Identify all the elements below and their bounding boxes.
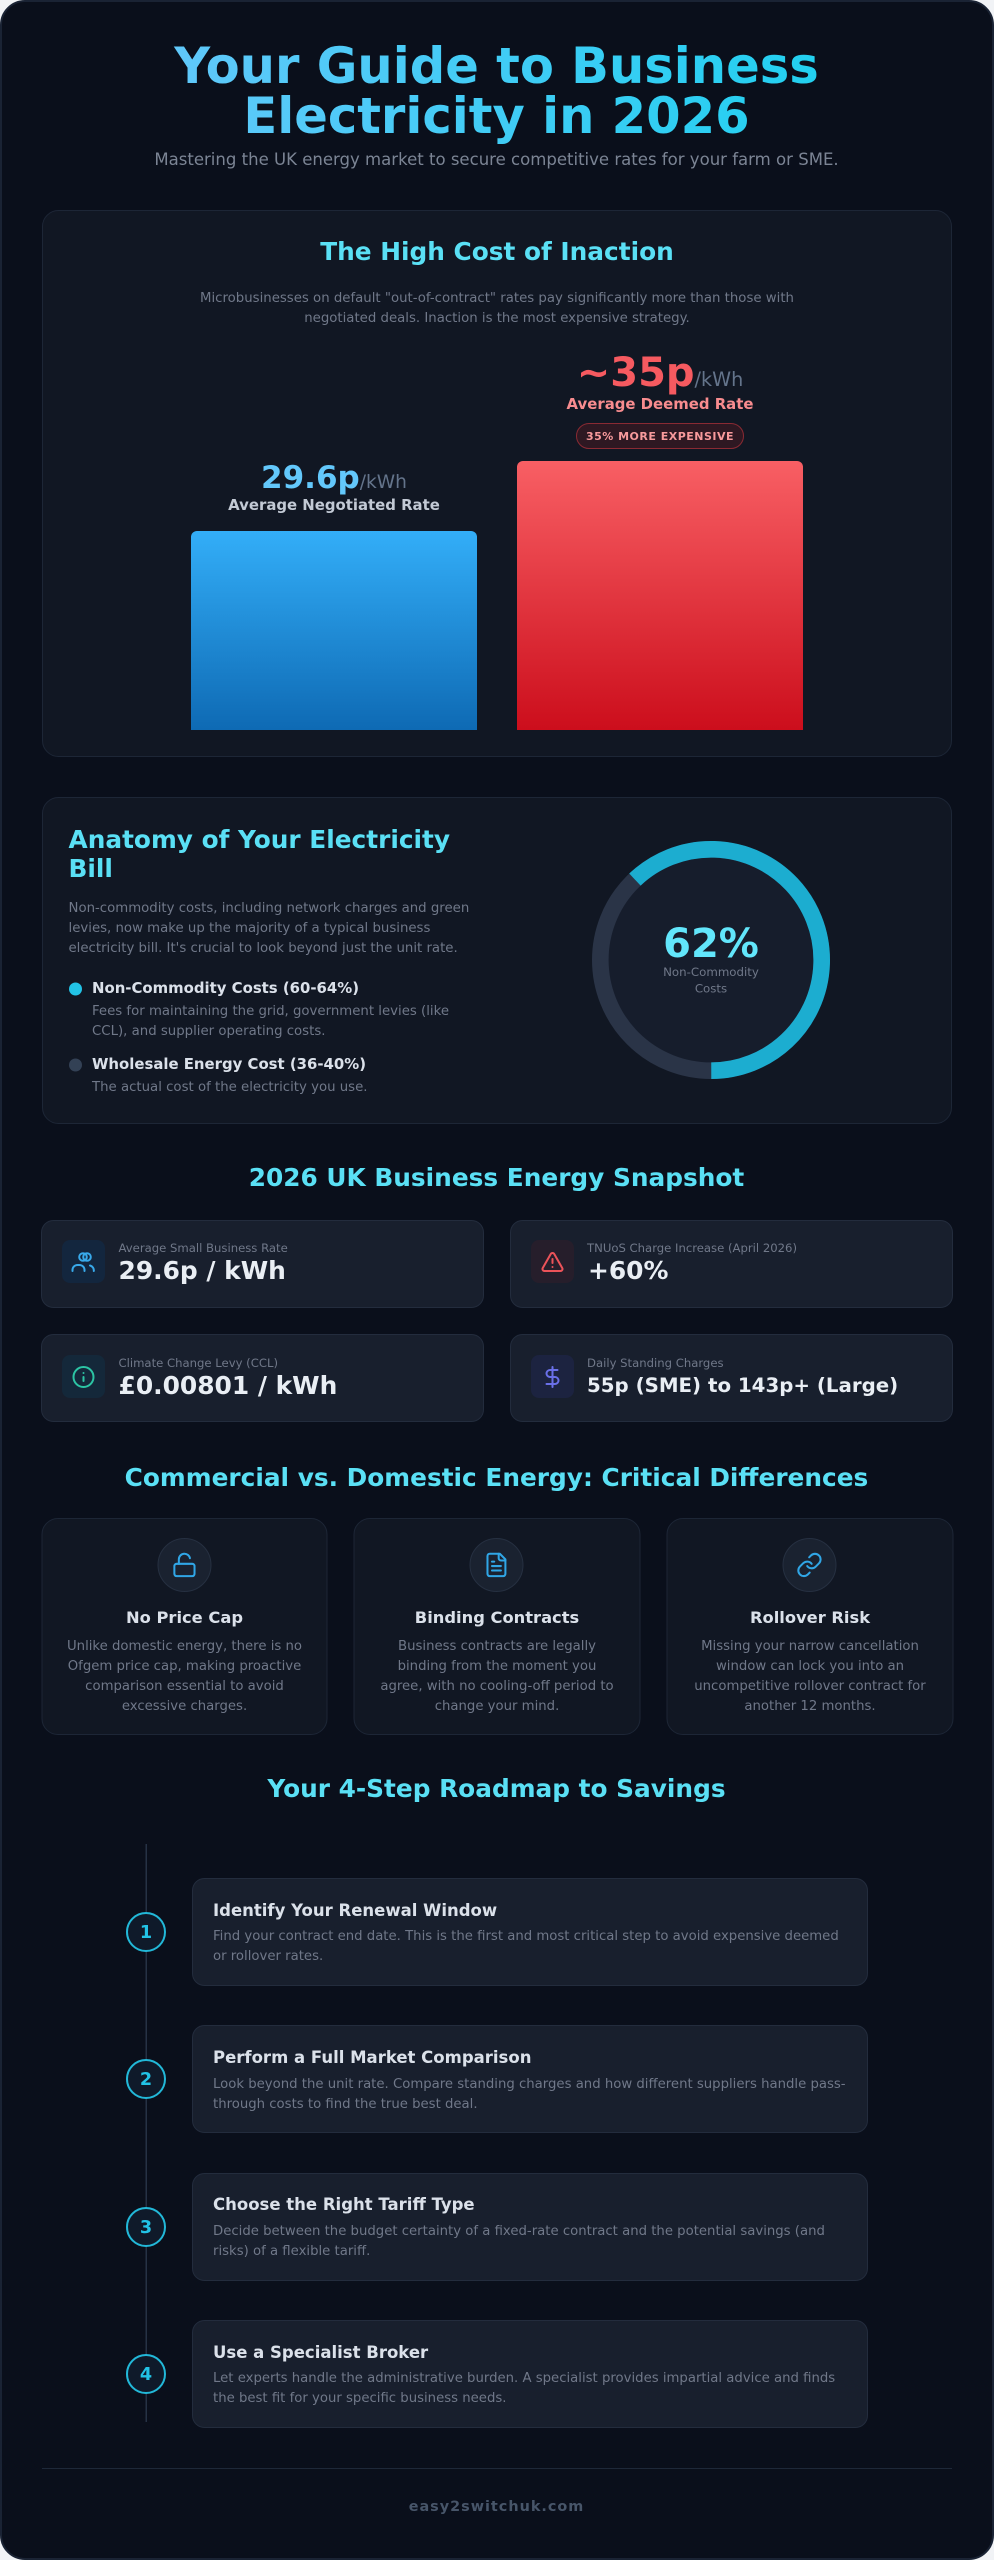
card: rollover risk: another 12 months. [744, 1699, 876, 1714]
icon: chain link [783, 1538, 836, 1592]
bar: deemed rate: Average Deemed Rate [567, 395, 753, 413]
title: Your Guide to Business [173, 37, 819, 95]
stat card: average small business rate: 29.6p / kWh [118, 1256, 286, 1285]
panel intro text: electricity bill. It's crucial to look beyond just the unit rate. [68, 941, 458, 956]
legend: wholesale energy cost [69, 1055, 368, 1095]
title [173, 37, 819, 145]
panel heading [68, 825, 450, 883]
legend: non-commodity costs: CCL), and supplier operating costs. [92, 1024, 325, 1039]
donut chart: 62% non-commodity: 62% [663, 921, 759, 967]
step 1: Find your contract end date. This is the first and most critical step to avoid expensive deemed [213, 1929, 839, 1944]
stat card: average small business rate: Average Small Business Rate [118, 1241, 288, 1255]
step 2 [127, 2026, 868, 2132]
step 3: Choose the Right Tariff Type [213, 2195, 475, 2214]
panel heading: The High Cost of Inaction [320, 237, 674, 266]
donut chart: 62% non-commodity: Non-Commodity [663, 965, 759, 979]
card: binding contracts: agree, with no cooling-off period to [380, 1679, 614, 1694]
step 4: the best fit for your specific business needs. [213, 2391, 506, 2406]
icon: users [62, 1240, 105, 1283]
heading: commercial vs domestic: Commercial vs. Domestic Energy: Critical Differences [125, 1463, 868, 1492]
step 2: through costs to find the true best deal. [213, 2097, 478, 2112]
icon: dollar sign [531, 1355, 574, 1398]
step number 4 [127, 2355, 165, 2393]
panel intro text: negotiated deals. Inaction is the most expensive strategy. [304, 311, 690, 326]
card: binding contracts: change your mind. [435, 1699, 559, 1714]
stat card: climate change levy [42, 1334, 484, 1422]
badge: 35% more expensive [576, 424, 744, 448]
card: rollover risk: uncompetitive rollover contract for [694, 1679, 926, 1694]
stat card: TNUoS charge increase [510, 1220, 952, 1308]
timeline line [146, 1844, 147, 2422]
stat card: climate change levy: Climate Change Levy (CCL) [118, 1356, 278, 1370]
step 3: Decide between the budget certainty of a fixed-rate contract and the potential savings (and [213, 2224, 825, 2239]
legend: non-commodity costs: Fees for maintaining the grid, government levies (like [92, 1004, 449, 1019]
panel: the high cost of inaction [42, 210, 952, 756]
step 2: Look beyond the unit rate. Compare standing charges and how different suppliers handle pass- [213, 2077, 846, 2092]
stat card: TNUoS charge increase: +60% [588, 1256, 668, 1285]
icon: info [62, 1355, 105, 1398]
badge: 35% more expensive: 35% MORE EXPENSIVE [586, 430, 734, 443]
bar: deemed rate [517, 350, 803, 730]
title: Electricity in 2026 [243, 87, 750, 145]
step 4: Let experts handle the administrative burden. A specialist provides impartial advice and finds [213, 2371, 835, 2386]
card: binding contracts: Business contracts are legally [398, 1639, 596, 1654]
stat card: daily standing charges [510, 1334, 952, 1422]
step number 1 [127, 1913, 165, 1951]
card: no price cap [42, 1518, 327, 1734]
step number 2 [127, 2060, 165, 2098]
panel intro text [200, 291, 794, 326]
legend: non-commodity costs [69, 979, 449, 1039]
card: no price cap: Ofgem price cap, making proactive [68, 1659, 301, 1674]
card: binding contracts: Binding Contracts [415, 1608, 579, 1627]
legend: wholesale energy cost: The actual cost of the electricity you use. [91, 1080, 368, 1095]
panel intro text: Microbusinesses on default "out-of-contract" rates pay significantly more than those with [200, 291, 794, 306]
card: rollover risk: window can lock you into an [716, 1659, 904, 1674]
stat card: average small business rate [42, 1220, 484, 1308]
card: binding contracts [354, 1518, 640, 1734]
card: no price cap: No Price Cap [126, 1608, 243, 1627]
stat card: climate change levy: £0.00801 / kWh [118, 1371, 337, 1400]
icon: document [470, 1538, 523, 1592]
card: rollover risk: Missing your narrow cancellation [701, 1639, 919, 1654]
step 1 [127, 1878, 868, 1986]
panel: anatomy of your electricity bill [42, 798, 952, 1124]
step 3: risks) of a flexible tariff. [213, 2244, 370, 2259]
bar: negotiated rate: 29.6p/kWh [261, 460, 407, 496]
legend: non-commodity costs: Non-Commodity Costs (60-64%) [92, 979, 359, 997]
step number 3: 3 [140, 2218, 152, 2238]
bar: deemed rate: ~35p/kWh [577, 350, 743, 396]
card: rollover risk: Rollover Risk [750, 1608, 871, 1627]
panel intro text: Non-commodity costs, including network charges and green [68, 901, 469, 916]
bar: negotiated rate [191, 460, 477, 730]
step 4 [127, 2320, 868, 2428]
step 2: Perform a Full Market Comparison [213, 2048, 531, 2067]
heading: roadmap: Your 4-Step Roadmap to Savings [266, 1774, 726, 1803]
step 3 [127, 2174, 868, 2280]
card: no price cap: Unlike domestic energy, there is no [67, 1639, 302, 1654]
step number 4: 4 [140, 2365, 152, 2385]
panel heading: Bill [68, 854, 113, 883]
bar: negotiated rate: Average Negotiated Rate [228, 496, 440, 514]
panel intro text: levies, now make up the majority of a typical business [68, 921, 430, 936]
donut chart: 62% non-commodity: Costs [695, 982, 727, 996]
card: no price cap: excessive charges. [122, 1699, 247, 1714]
heading: snapshot: 2026 UK Business Energy Snapshot [249, 1163, 744, 1192]
step number 1: 1 [140, 1923, 152, 1943]
subtitle: Mastering the UK energy market to secure competitive rates for your farm or SME. [154, 150, 839, 169]
stat card: daily standing charges: Daily Standing Charges [587, 1356, 724, 1370]
stat card: daily standing charges: 55p (SME) to 143p+ (Large) [587, 1374, 898, 1397]
step 1: Identify Your Renewal Window [213, 1901, 497, 1920]
step number 3 [127, 2208, 165, 2246]
card: no price cap: comparison essential to avoid [85, 1679, 284, 1694]
step 4: Use a Specialist Broker [213, 2343, 429, 2362]
panel intro text [68, 901, 469, 956]
step 1: or rollover rates. [213, 1949, 323, 1964]
donut chart: 62% non-commodity [555, 804, 867, 1116]
card: rollover risk [667, 1518, 953, 1734]
panel heading: Anatomy of Your Electricity [68, 825, 450, 854]
stat card: TNUoS charge increase: TNUoS Charge Increase (April 2026) [586, 1241, 797, 1255]
step number 2: 2 [140, 2070, 152, 2090]
card: binding contracts: binding from the moment you [398, 1659, 596, 1674]
legend: wholesale energy cost: Wholesale Energy Cost (36-40%) [92, 1055, 366, 1073]
icon: open lock [158, 1538, 211, 1592]
icon: warning triangle [531, 1240, 574, 1283]
footer: easy2switchuk.com [409, 2499, 584, 2515]
